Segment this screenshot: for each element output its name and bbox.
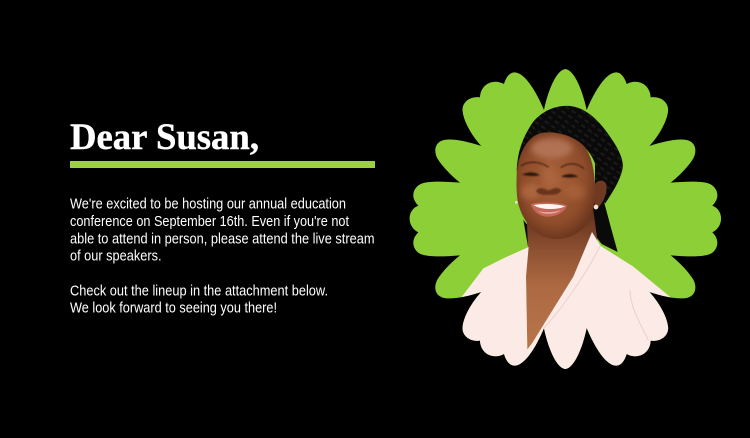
blouse [460,232,673,370]
woman portrait [460,106,673,370]
text block: invitation message: conference on September 16th. Even if you're not [70,214,349,230]
hair [517,106,623,203]
text block: invitation message: We're excited to be hosting our annual education [70,197,346,213]
blouse folds [544,246,648,340]
brows, eyes and nose [521,162,584,195]
text block: invitation message: We look forward to seeing you there! [70,301,277,317]
blouse right with collar [528,232,673,370]
facial highlights [521,138,584,200]
text block: invitation message: Check out the lineup in the attachment below. [70,283,328,299]
green heading rule [70,161,375,168]
face [516,132,596,239]
blouse left [460,247,573,370]
heading: Dear Susan: Dear Susan, [70,117,259,158]
text block: invitation message: of our speakers. [70,249,162,265]
portrait in flower shape [410,69,721,370]
text block: invitation message [70,197,374,317]
text block: invitation message: able to attend in person, please attend the live stream [70,231,374,247]
neck and chest [526,210,597,349]
smile [531,202,567,217]
ear and earring [515,181,607,210]
hair behind neck [523,201,618,252]
flower background [410,69,721,369]
